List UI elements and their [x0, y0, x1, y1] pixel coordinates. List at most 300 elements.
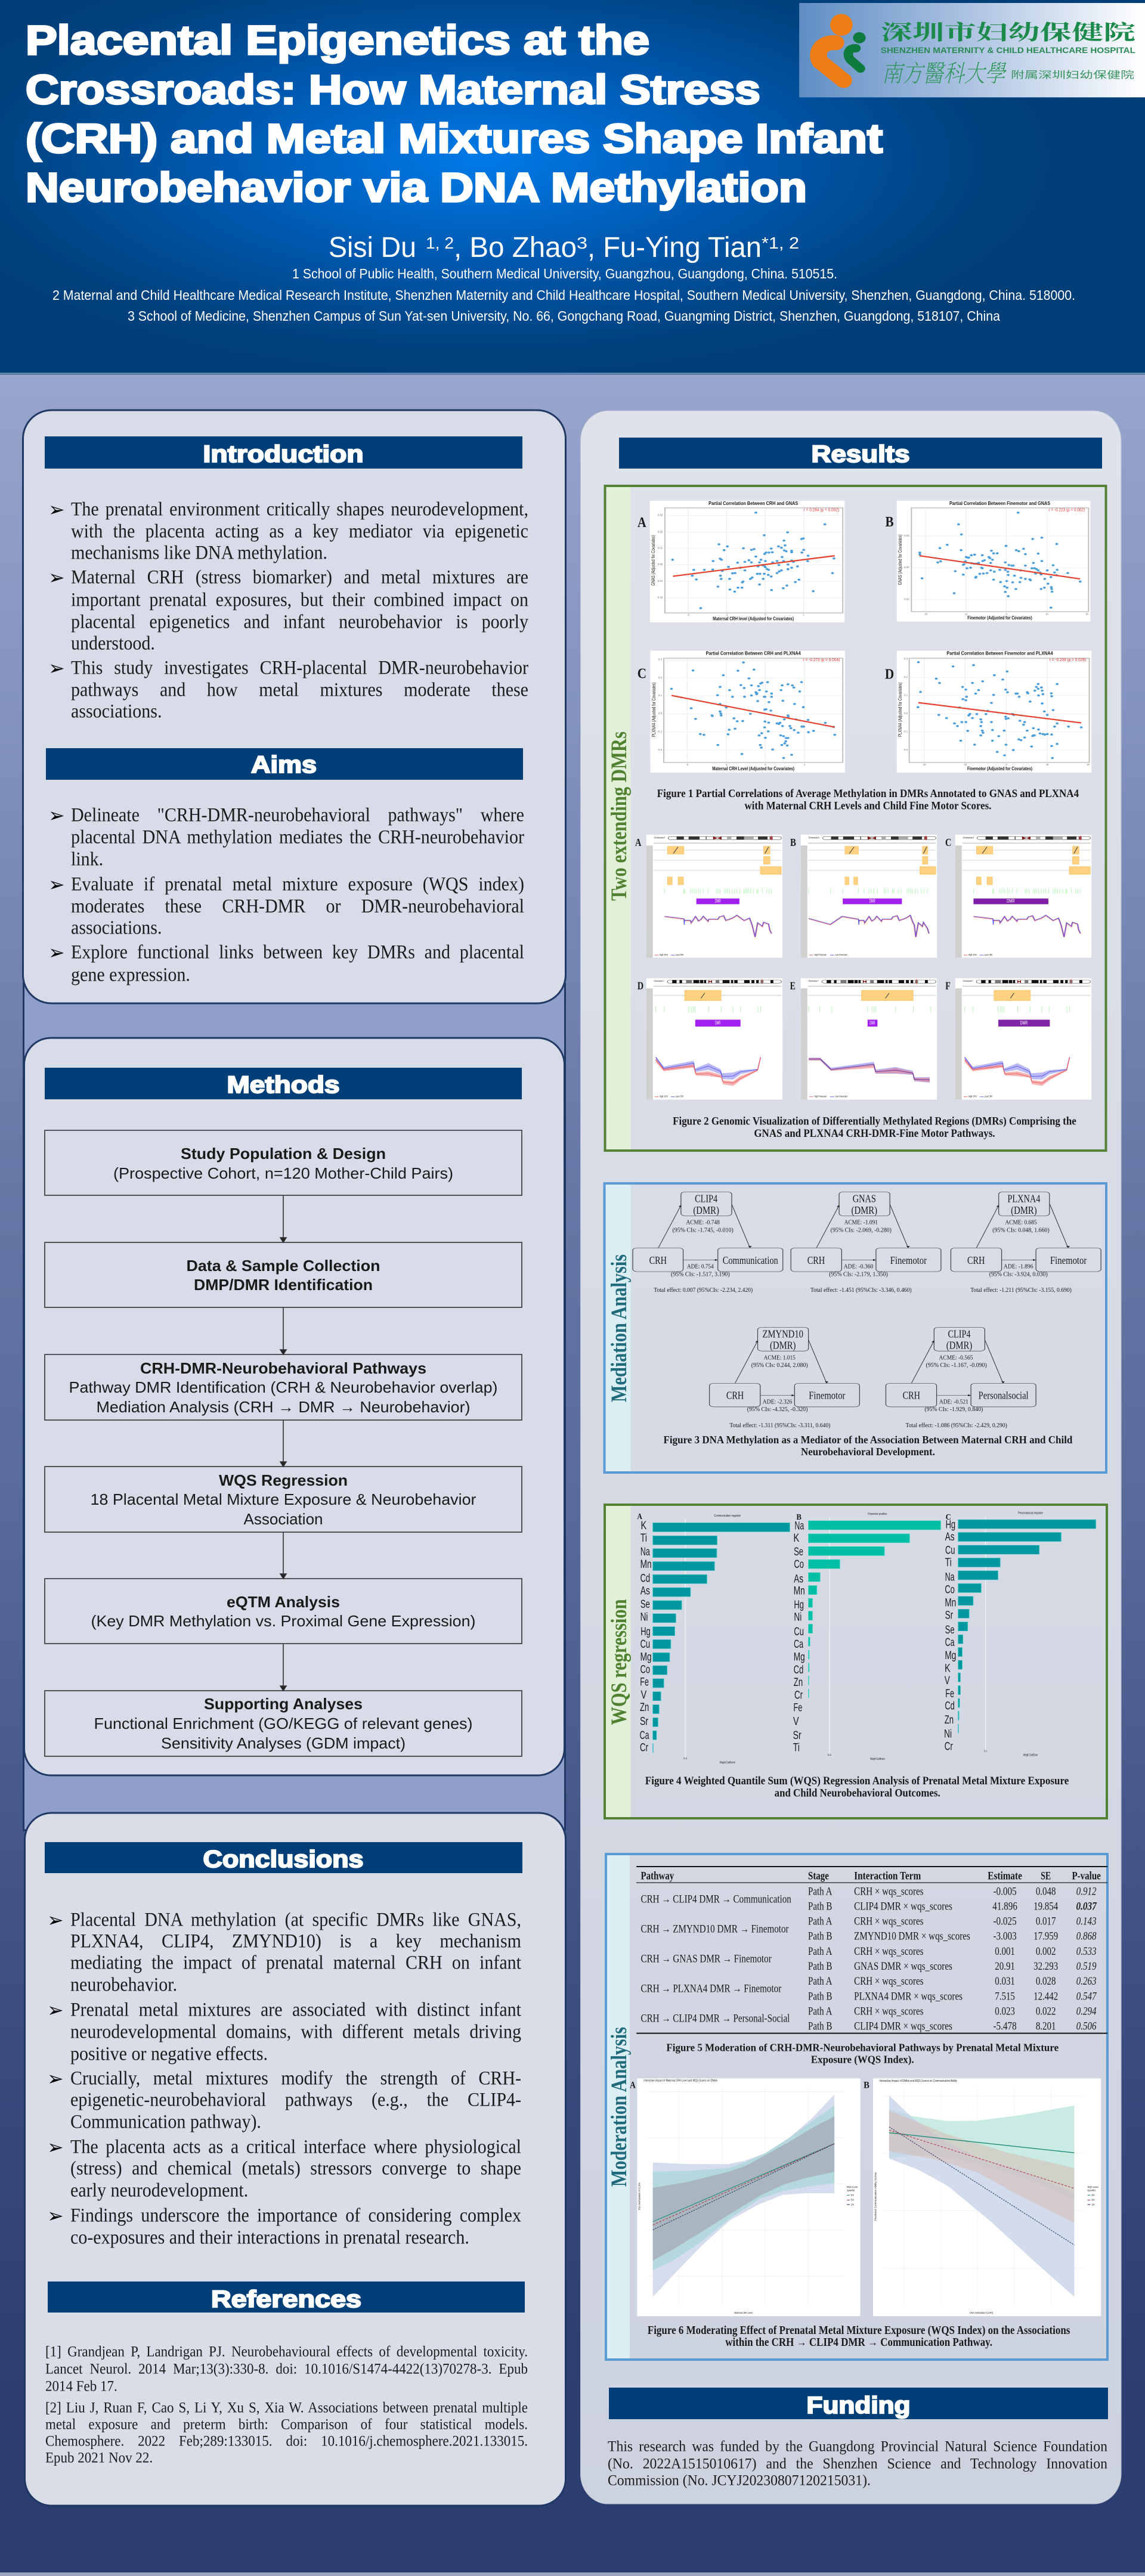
table rows: -5.478 — [993, 2020, 1017, 2032]
section: two extending DMRs — [605, 486, 1106, 1151]
authors: , Bo Zhao — [454, 232, 577, 264]
diagram: CLIP4 personalsocial: CRH — [903, 1390, 920, 1402]
genome track C — [955, 835, 1091, 957]
scatter D: -10 — [964, 764, 967, 767]
scatter D: 0.1 — [904, 694, 908, 697]
bar chart B: Cu — [794, 1625, 804, 1638]
diagram: CLIP4 communication: CLIP4 — [695, 1193, 717, 1205]
figure 1 caption: with Maternal CRH Levels and Child Fine Motor Scores. — [744, 799, 991, 812]
figure 5: moderation table: P-value — [1072, 1870, 1101, 1881]
diagram: GNAS finemotor: (95% CIs: -2.069, -0.280) — [831, 1227, 892, 1233]
left column backing — [24, 984, 565, 1830]
scatter D: 0.2 — [904, 676, 908, 679]
figure 1 caption — [657, 787, 1079, 812]
bar chart B: Cr — [794, 1688, 803, 1701]
table rows: CRH × wqs_scores — [854, 1945, 924, 1957]
diagram: ZMYND10 finemotor: (95% CIs: 0.244, 2.080) — [751, 1362, 808, 1369]
diagram: CLIP4 communication: (95% CIs: -1.517, 3.190) — [671, 1271, 730, 1278]
table rows: 0.031 — [995, 1974, 1015, 1987]
table rows: ZMYND10 DMR × wqs_scores — [854, 1930, 970, 1942]
bar chart C: Sr — [945, 1608, 953, 1622]
panel letters: B — [790, 837, 796, 848]
figure 2: genomic visualization — [635, 835, 1091, 1139]
scatter C: 1 — [804, 764, 805, 767]
diagram: ZMYND10 finemotor: (DMR) — [770, 1340, 796, 1351]
genome track F: High CRH — [968, 1095, 977, 1098]
interaction plot A: 50% — [851, 2199, 854, 2202]
genome track D — [646, 978, 782, 1099]
text: introduction bullets: pathways and how metal mixtures moderate these — [71, 680, 528, 700]
diagram: CLIP4 communication: (95% CIs: -1.745, -0.010) — [672, 1227, 734, 1233]
panel letters: D — [638, 980, 643, 992]
text: funding statement — [608, 2438, 1107, 2489]
interaction plot A: Interactive Impact of Maternal CRH Level and WQS Scores on DNAm — [643, 2079, 717, 2082]
figure 3 caption: Neurobehavioral Development. — [801, 1446, 935, 1458]
text: introduction bullets: ➢ — [48, 498, 65, 521]
step: data collection: DMP/DMR Identification — [194, 1276, 373, 1294]
authors: Sisi Du — [329, 232, 416, 264]
scatter B: 20 — [1086, 613, 1088, 616]
table rows: CLIP4 DMR × wqs_scores — [854, 1900, 952, 1912]
section: moderation analysis — [606, 1854, 1107, 2360]
interaction plot B: DNA methylation (CLIP4) — [970, 2311, 994, 2315]
bar chart C: Weight Coefficient — [1023, 1753, 1038, 1757]
table rows: Path B — [808, 1900, 832, 1912]
genome track A: High CRH — [660, 954, 668, 956]
text: aims bullets: moderates these CRH-DMR or DMR-neurobehavioral — [71, 896, 524, 917]
panel letters: C — [945, 837, 951, 848]
bar chart B: Fe — [794, 1701, 802, 1714]
figure 6 caption — [648, 2323, 1070, 2349]
title: Placental Epigenetics at the — [26, 17, 649, 63]
table header: Stage — [808, 1870, 829, 1881]
heading: introduction — [45, 436, 522, 469]
text: introduction bullets: ➢ — [48, 566, 65, 589]
text: conclusions bullets: Prenatal metal mixtures are associated with distinct infant — [70, 2000, 521, 2020]
side label: WQS regression — [607, 1599, 632, 1725]
bar chart A — [637, 1512, 790, 1765]
diagram: ZMYND10 finemotor: Finemotor — [809, 1390, 846, 1402]
text: introduction bullets: placental epigenetics and infant neurobehavior is poorly — [71, 612, 528, 633]
diagram: GNAS finemotor: ACME: -1.091 — [844, 1219, 878, 1226]
diagram: CLIP4 personalsocial: ACME: -0.565 — [939, 1354, 973, 1361]
table rows: 0.023 — [995, 2004, 1015, 2017]
arrow — [280, 1195, 286, 1242]
diagram: CLIP4 personalsocial: (DMR) — [946, 1340, 972, 1351]
step: WQS regression: WQS Regression — [219, 1471, 348, 1489]
text: references: [1] Grandjean P, Landrigan PJ. Neurobehavioural effects of developmental toxicity. — [45, 2343, 528, 2360]
table pathway column — [641, 1893, 791, 2025]
diagram: GNAS finemotor: Total effect: -1.451 (95%CIs: -3.346, 0.460) — [810, 1287, 912, 1294]
figure 2 caption — [673, 1115, 1076, 1139]
diagram: CLIP4 communication: CRH — [649, 1254, 667, 1266]
scatter D: 0.0 — [904, 712, 908, 715]
text: conclusions bullets: Crucially, metal mixtures modify the strength of CRH- — [70, 2068, 521, 2089]
step: study population: Study Population & Design — [181, 1145, 386, 1163]
step: study population — [45, 1130, 522, 1195]
bar chart A: Mn — [640, 1557, 652, 1570]
scatter C: -2 — [686, 764, 688, 767]
table rows: 32.293 — [1033, 1960, 1058, 1972]
panel letters — [635, 837, 951, 992]
step: eQTM analysis — [45, 1579, 522, 1644]
diagram: PLXNA4 finemotor: (95% CIs: -3.924, 0.030) — [989, 1271, 1048, 1278]
genome track B: DMR — [869, 899, 875, 904]
scatter C: PLXNA4 (Adjusted for Covariates) — [651, 682, 657, 737]
text: aims bullets: placental DNA methylation mediates the CRH-neurobehavior — [71, 827, 524, 848]
interaction plot B: 90% — [1091, 2194, 1095, 2197]
scatter B: 0 — [1005, 613, 1007, 616]
diagram: CLIP4 communication: ADE: 0.754 — [687, 1263, 714, 1270]
figure 4 caption — [645, 1775, 1069, 1799]
table rule: header — [636, 1881, 1107, 1884]
table rows: 0.001 — [995, 1945, 1015, 1957]
bar chart C: C — [946, 1512, 951, 1521]
text: conclusions bullets: PLXNA4, CLIP4, ZMYND10) is a key mechanism — [70, 1931, 521, 1952]
header lower edge — [0, 373, 1145, 375]
bar chart A: K — [641, 1518, 647, 1532]
table rows: CRH × wqs_scores — [854, 2004, 924, 2017]
scatter A: -0.02 — [657, 596, 663, 599]
authors: 1, 2 — [426, 234, 454, 252]
genome track D: High CRH — [660, 1095, 668, 1098]
table rows: Path A — [808, 1945, 832, 1957]
scatter D: 0 — [1005, 764, 1007, 767]
table rows: 8.201 — [1036, 2020, 1056, 2032]
step: eQTM analysis: eQTM Analysis — [227, 1593, 340, 1611]
table rows: -0.025 — [993, 1915, 1017, 1927]
bar chart C: Cu — [945, 1543, 955, 1557]
interaction plot A: Maternal CRH Level — [734, 2311, 753, 2315]
figure 3 caption — [663, 1433, 1072, 1458]
text: funding statement: Commission (No. JCYJ20230807120215031). — [608, 2472, 871, 2489]
text: conclusions bullets: epigenetic-neurobehavioral pathways (e.g., the CLIP4- — [70, 2090, 521, 2110]
scatter C — [650, 651, 845, 773]
table rows: -0.005 — [993, 1885, 1017, 1898]
bar chart C: Fe — [945, 1687, 954, 1700]
text: introduction bullets: understood. — [71, 633, 155, 654]
table rows: GNAS DMR × wqs_scores — [854, 1960, 952, 1972]
genome track F: DMR — [1020, 1021, 1028, 1026]
scatter B: -10 — [964, 613, 968, 616]
scatter D: -0.1 — [903, 730, 908, 733]
panel letters: A — [630, 2079, 636, 2090]
scatter C: Maternal CRH Level (Adjusted for Covariates) — [712, 766, 794, 771]
scatter A: -0.01 — [657, 580, 663, 583]
text: aims bullets: ➢ — [48, 873, 65, 896]
text: conclusions bullets: neurodevelopmental domains, with different metals driving — [70, 2022, 521, 2042]
figure 5: moderation table: 0.912 — [1076, 1885, 1097, 1898]
figure 5: moderation table: 0.143 — [1076, 1915, 1096, 1927]
panel letters — [638, 514, 894, 682]
interaction plot A: WQS scores — [847, 2186, 858, 2188]
bar chart C: Ti — [945, 1555, 952, 1569]
heading: references — [48, 2281, 525, 2312]
figure 5: moderation table: 0.294 — [1076, 2004, 1097, 2017]
bar chart B — [793, 1512, 940, 1761]
bar chart C: V — [945, 1673, 950, 1687]
text: references: 2014 Feb 17. — [45, 2378, 117, 2394]
scatter A: Maternal CRH level (Adjusted for Covariates) — [713, 616, 794, 622]
bar chart C: Ni — [944, 1727, 952, 1740]
bar chart A: Cu — [640, 1637, 650, 1650]
panel letters: B — [864, 2079, 869, 2090]
text: introduction bullets: ➢ — [48, 656, 65, 680]
text: aims bullets: gene expression. — [71, 965, 190, 985]
scatter C: -0.1 — [657, 730, 662, 733]
step: supporting analyses: Supporting Analyses — [204, 1695, 363, 1713]
heading: results — [619, 438, 1102, 469]
bar chart A: Sr — [640, 1715, 648, 1728]
step: pathways: Mediation Analysis (CRH → DMR → Neurobehavior) — [97, 1398, 470, 1416]
text: references: Epub 2021 Nov 22. — [45, 2450, 153, 2466]
bar chart B: Hg — [794, 1598, 804, 1611]
text: references: metal exposure and preterm birth: Comparison of four statistical models. — [45, 2416, 528, 2432]
scatter B: 0.00 — [904, 566, 909, 569]
header band — [0, 0, 1145, 374]
bar chart A: 0.1 — [683, 1757, 687, 1760]
table rows: 0.028 — [1036, 1974, 1056, 1987]
diagram: GNAS finemotor: (95% CIs: -2.179, 1.350) — [829, 1271, 888, 1278]
genome track D: DMR — [715, 1021, 720, 1026]
step: pathways: CRH-DMR-Neurobehavioral Pathways — [140, 1359, 426, 1377]
genome track E: Chromosome 7 — [809, 980, 819, 983]
panel: results — [581, 411, 1121, 2504]
panel: introduction and aims — [23, 410, 565, 1003]
scatter A: 1 — [803, 613, 804, 616]
text: funding statement: (No. 2022A1515010617) and the Shenzhen Science and Technology Innovation — [608, 2456, 1107, 2472]
scatter A: -2 — [687, 613, 689, 616]
step: study population: (Prospective Cohort, n=120 Mother-Child Pairs) — [113, 1164, 453, 1182]
table rows: CRH × wqs_scores — [854, 1915, 924, 1927]
step: supporting analyses: Sensitivity Analyses (GDM impact) — [161, 1734, 406, 1752]
figure 6 caption: within the CRH → CLIP4 DMR → Communication Pathway. — [725, 2335, 992, 2349]
text: aims bullets — [48, 804, 524, 985]
step: WQS regression — [45, 1467, 522, 1532]
text: aims bullets: associations. — [71, 917, 162, 938]
scatter B: GNAS (Adjusted for Covariates) — [897, 534, 903, 585]
interaction plot A: 10% — [851, 2203, 854, 2206]
text: conclusions bullets: ➢ — [47, 2135, 64, 2159]
scatter A: GNAS (Adjusted for Covariates) — [650, 535, 656, 585]
figure 3: mediation diagrams: Communication — [723, 1254, 778, 1266]
bar chart B: B — [796, 1512, 802, 1521]
bar chart C: Zn — [945, 1713, 954, 1726]
bar chart B: Ni — [794, 1610, 802, 1623]
scatter B: Finemotor (Adjusted for Covariates) — [967, 616, 1032, 621]
authors: *1, 2 — [762, 234, 799, 252]
scatter B: -0.02 — [903, 598, 909, 601]
text: conclusions bullets: (stress) and chemical (metals) stressors converge to shape — [70, 2158, 521, 2179]
diagram: GNAS finemotor: Finemotor — [890, 1254, 927, 1266]
text: conclusions bullets: ➢ — [47, 2067, 64, 2090]
panel letters: D — [885, 667, 894, 682]
table rows: -3.003 — [993, 1930, 1017, 1942]
figure 1: partial correlation scatter plots — [638, 501, 1091, 812]
diagram: CLIP4 communication: (DMR) — [693, 1204, 719, 1216]
figure 5: moderation table: CRH → ZMYND10 DMR → Finemotor — [641, 1923, 789, 1935]
heading: conclusions: Conclusions — [203, 1846, 364, 1873]
side label: Moderation Analysis — [607, 2027, 632, 2187]
diagram: ZMYND10 finemotor: (95% CIs: -4.325, -0.320) — [747, 1406, 807, 1413]
section: mediation analysis — [605, 1183, 1106, 1473]
text: introduction bullets: associations. — [71, 701, 162, 722]
text: introduction bullets — [48, 498, 528, 722]
interaction plot B: 10% — [1091, 2203, 1095, 2206]
text: conclusions bullets: early neurodevelopment. — [70, 2180, 248, 2201]
text: conclusions bullets: co-exposures and their interactions in prenatal research. — [70, 2227, 469, 2248]
affiliations — [52, 266, 1075, 324]
arrow — [280, 1307, 286, 1354]
text: introduction bullets: with the placenta acting as a key mediator via epigenetic — [71, 521, 528, 542]
heading: funding: Funding — [806, 2392, 910, 2419]
text: references: Chemosphere. 2022 Feb;289:133015. doi: 10.1016/j.chemosphere.2021.133015. — [45, 2433, 528, 2449]
bar chart C: Cd — [945, 1699, 955, 1712]
side strip — [607, 1855, 630, 2358]
scatter A: -1 — [725, 613, 728, 616]
bar chart A: Fe — [640, 1675, 649, 1688]
interaction plot B: Interactive Impact of DNAm and WQS Scores on Communication Ability — [880, 2079, 957, 2083]
section: WQS regression — [605, 1505, 1107, 1818]
bar chart A: Communication negative — [714, 1514, 741, 1518]
authors — [329, 232, 799, 264]
bar chart B: 0.1 — [828, 1754, 831, 1756]
hospital logo: SHENZHEN MATERNITY & CHILD HEALTHCARE HOSPITAL — [881, 46, 1135, 55]
diagram: CLIP4 communication: ACME: -0.748 — [686, 1219, 720, 1226]
bar chart C: Cr — [945, 1740, 953, 1753]
bar chart B: Mn — [794, 1584, 805, 1597]
scatter A: 0.03 — [658, 514, 663, 517]
step: supporting analyses: Functional Enrichment (GO/KEGG of relevant genes) — [94, 1715, 472, 1732]
interaction plot A: (quantile) — [847, 2189, 855, 2191]
diagram: CLIP4 personalsocial: CLIP4 — [948, 1328, 971, 1340]
bar chart B: Se — [794, 1545, 803, 1558]
genome track D: Low CRH — [676, 1095, 683, 1098]
bar chart B: Sr — [793, 1728, 802, 1741]
scatter C: -1 — [725, 764, 728, 767]
diagram: PLXNA4 finemotor: (95% CIs: 0.048, 1.660) — [992, 1227, 1050, 1233]
scatter D: -0.2 — [903, 749, 908, 752]
panel letters: A — [638, 514, 646, 531]
scatter D: -20 — [923, 764, 926, 767]
diagram: CLIP4 personalsocial: Total effect: -1.086 (95%CIs: -2.429, 0.290) — [906, 1422, 1007, 1429]
interaction plot B: Predicted Communication Ability Scores — [874, 2172, 877, 2221]
interaction plot B — [873, 2078, 1101, 2316]
text: conclusions bullets: ➢ — [47, 1998, 64, 2022]
diagram: CLIP4 personalsocial — [886, 1327, 1036, 1429]
figure 5: moderation table: 0.533 — [1076, 1945, 1096, 1957]
interaction plot B: 50% — [1091, 2199, 1095, 2202]
bar chart B: Zn — [794, 1675, 803, 1688]
heading: conclusions — [45, 1842, 522, 1873]
table rows: Path B — [808, 1989, 832, 2002]
bar chart A: V — [641, 1688, 647, 1701]
diagram: ZMYND10 finemotor: ZMYND10 — [762, 1328, 803, 1340]
panel letters — [630, 2079, 869, 2090]
step: pathways — [45, 1354, 522, 1420]
bar chart B: Na — [794, 1519, 804, 1532]
bar chart C: Personalsocial negative — [1018, 1511, 1043, 1515]
bar chart A: Se — [640, 1597, 650, 1611]
table header: Estimate — [988, 1870, 1022, 1881]
table rows: Path A — [808, 2004, 832, 2017]
scatter B: 10 — [1045, 613, 1048, 616]
diagram: CLIP4 personalsocial: Personalsocial — [979, 1390, 1029, 1402]
bar chart B: K — [794, 1531, 800, 1545]
heading: aims: Aims — [251, 752, 317, 778]
text: conclusions bullets: Communication pathway). — [70, 2112, 261, 2132]
scatter D — [897, 651, 1091, 773]
heading: results: Results — [811, 441, 910, 467]
step: WQS regression: Association — [243, 1510, 323, 1528]
text: references — [45, 2343, 528, 2466]
scatter A: r = 0.284 (p = 0.002) — [804, 507, 839, 512]
diagram: CLIP4 communication — [633, 1192, 783, 1294]
bar chart B: Mg — [794, 1650, 805, 1663]
bar chart B: Finemotor positive — [868, 1512, 887, 1516]
genome track A: Low CRH — [676, 954, 683, 956]
table rows: 7.515 — [995, 1989, 1015, 2002]
table rows — [808, 1885, 1097, 2032]
scatter A — [650, 501, 844, 622]
bar chart C: Ca — [945, 1635, 955, 1649]
diagram: CLIP4 personalsocial: (95% CIs: -1.167, -0.090) — [926, 1362, 987, 1369]
authors: 3 — [577, 234, 587, 252]
panel: conclusions and references — [25, 1813, 565, 2506]
text: aims bullets: link. — [71, 849, 103, 870]
scatter D: r = -0.208 (p = 0.028) — [1050, 657, 1086, 662]
genome track C: DMR — [1007, 899, 1015, 904]
genome track B: Chromosome 8 — [809, 836, 819, 839]
genome track F: Low CRH — [985, 1095, 992, 1098]
genome track B — [801, 835, 937, 957]
figure 5: moderation table: 0.519 — [1076, 1960, 1097, 1972]
hospital logo: 南方醫科大學 — [882, 55, 1007, 89]
interaction plot A: 90% — [851, 2194, 854, 2197]
table rows: 41.896 — [992, 1900, 1017, 1912]
arrow heads — [679, 1205, 1070, 1396]
scatter C: Partial Correlation Between CRH and PLXNA4 — [706, 651, 801, 656]
bar chart C — [944, 1511, 1096, 1757]
bar chart A: A — [637, 1512, 642, 1521]
diagram: GNAS finemotor — [791, 1192, 941, 1294]
hospital logo — [799, 3, 1145, 97]
heading: aims — [46, 748, 523, 780]
step: data collection: Data & Sample Collection — [186, 1257, 380, 1275]
figure 5: moderation table: 0.506 — [1076, 2020, 1097, 2032]
scatter A: 0.02 — [658, 531, 663, 534]
panel: methods — [24, 1038, 564, 1775]
diagram: CLIP4 personalsocial: (95% CIs: -1.929, 0.840) — [924, 1406, 983, 1413]
bar chart A: Cr — [640, 1741, 648, 1754]
scatter D: PLXNA4 (Adjusted for Covariates) — [897, 682, 903, 737]
interaction plot A: DNA methylation of CLIP4 — [638, 2183, 641, 2210]
diagram: CLIP4 personalsocial: ADE: -0.521 — [939, 1399, 968, 1405]
bar chart C: Hg — [946, 1517, 955, 1531]
table header: Interaction Term — [854, 1870, 921, 1881]
genome track E: DMR — [869, 1021, 875, 1026]
interaction plot B: WQS scores — [1087, 2186, 1098, 2188]
title: Neurobehavior via DNA Methylation — [26, 165, 807, 210]
table rows: Path B — [808, 1930, 832, 1942]
table rows: 20.91 — [995, 1960, 1015, 1972]
bar chart C: 0.1 — [984, 1750, 987, 1753]
title: (CRH) and Metal Mixtures Shape Infant — [26, 116, 883, 162]
genome track A — [646, 835, 782, 957]
scatter B: 0.02 — [904, 535, 909, 538]
table rows: 0.048 — [1036, 1885, 1056, 1898]
genome track E — [801, 978, 937, 1099]
